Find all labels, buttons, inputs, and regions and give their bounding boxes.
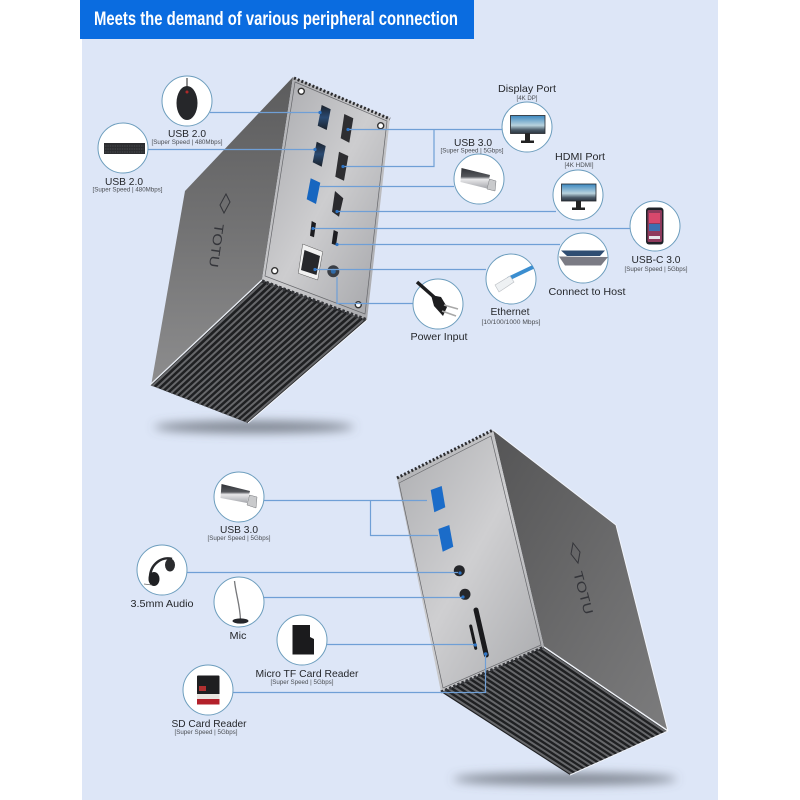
heat sink fins [150,280,367,423]
callout: Mic [214,577,264,642]
callout: Display Port [498,83,556,152]
connector: power [337,277,413,304]
callout: Display Port: [4K DP] [516,95,538,102]
callout: SD Card Reader: SD Card Reader [172,718,247,730]
icon: keyboard [104,143,145,154]
icon: micro SD card [292,625,314,654]
connector: mic [264,596,464,598]
callout: USB 2.0 mouse: USB 2.0 [168,128,206,140]
heat sink fins [441,647,668,775]
title banner: Meets the demand of various peripheral connection [94,9,458,30]
connector: micro TF [327,644,475,646]
connector: SD [233,654,486,692]
port end markers [311,111,488,656]
icon: USB stick [460,168,496,191]
side face with logo [151,77,293,386]
callout: USB 3.0 stick: USB 3.0 [454,137,492,149]
callout: Connect to Host [548,233,626,298]
icon: laptop [559,250,608,266]
icon: USB stick [220,484,257,508]
callout: Ethernet: [10/100/1000 Mbps] [482,319,541,326]
connector: Display Port [343,130,502,166]
callout: HDMI Port: [4K HDMI] [564,162,594,169]
callout: SD Card Reader: [Super Speed | 5Gbps] [174,729,238,736]
callout: USB 2.0 mouse: [Super Speed | 480Mbps] [152,139,223,146]
callout: USB-C 3.0: USB-C 3.0 [632,254,681,266]
callout: Power Input [410,279,468,343]
connector: top dock USB 2.0 mouse [210,112,320,114]
icon: plug [417,282,458,316]
callout: Micro TF Card Reader: Micro TF Card Reader [256,668,359,680]
icon: monitor [562,184,596,210]
port plate [262,77,390,320]
icon: phone [646,208,664,244]
callout: USB 3.0 stick: [Super Speed | 5Gbps] [440,148,504,154]
callout: USB-C 3.0 [624,201,688,273]
callout: HDMI Port [553,151,605,220]
callout: USB 2.0 mouse [152,76,223,146]
callout: USB 3.0 front [208,472,271,542]
callout: USB 3.0 stick [440,137,504,204]
callout: HDMI Port: HDMI Port [555,151,605,163]
callout: USB 3.0 front: USB 3.0 [220,524,258,536]
callout: Micro TF Card Reader: [Super Speed | 5Gbps] [270,679,334,686]
callout: 3.5mm Audio: 3.5mm Audio [130,598,194,610]
icon: monitor [510,116,545,143]
device: top dock, rear view [150,77,390,433]
device: bottom dock, front view [397,430,677,785]
callout: USB 2.0 keyboard: USB 2.0 [105,176,143,188]
connector: audio [187,572,458,574]
callout: USB 3.0 front: [Super Speed | 5Gbps] [208,535,271,542]
icon: microphone [232,581,248,624]
connector: top dock USB 2.0 keyboard [148,148,315,150]
icon: mouse [176,78,198,120]
callout: Micro TF Card Reader [256,615,359,686]
callout: Ethernet: Ethernet [490,306,530,318]
callout: SD Card Reader [172,665,247,736]
icon: ethernet cable [495,267,533,292]
callout: Ethernet [482,254,541,326]
side face with logo: TOTU [570,570,596,616]
connector: HDMI [337,210,556,212]
callout: Display Port: Display Port [498,83,556,95]
callout: Mic: Mic [230,630,246,642]
title banner [80,0,474,39]
background panel [82,0,718,800]
side face with logo: TOTU [206,223,227,268]
callout: USB 2.0 keyboard [92,123,163,194]
connector: Ethernet [315,268,486,270]
connector: bottom dock USB 3.0 [264,500,438,536]
callout: Connect to Host: Connect to Host [548,286,626,298]
connector: host [337,244,560,246]
connector: top dock USB 3.0 [320,186,454,188]
port plate [397,430,544,692]
callout: USB 2.0 keyboard: [Super Speed | 480Mbps] [92,186,163,194]
side face with logo [493,430,668,731]
callout: Power Input: Power Input [410,331,468,343]
callout: 3.5mm Audio [130,545,194,610]
connector: USB-C [313,228,630,230]
icon: SD card [197,676,220,704]
icon: headphones [144,558,175,586]
callout: USB-C 3.0: [Super Speed | 5Gbps] [624,266,688,273]
